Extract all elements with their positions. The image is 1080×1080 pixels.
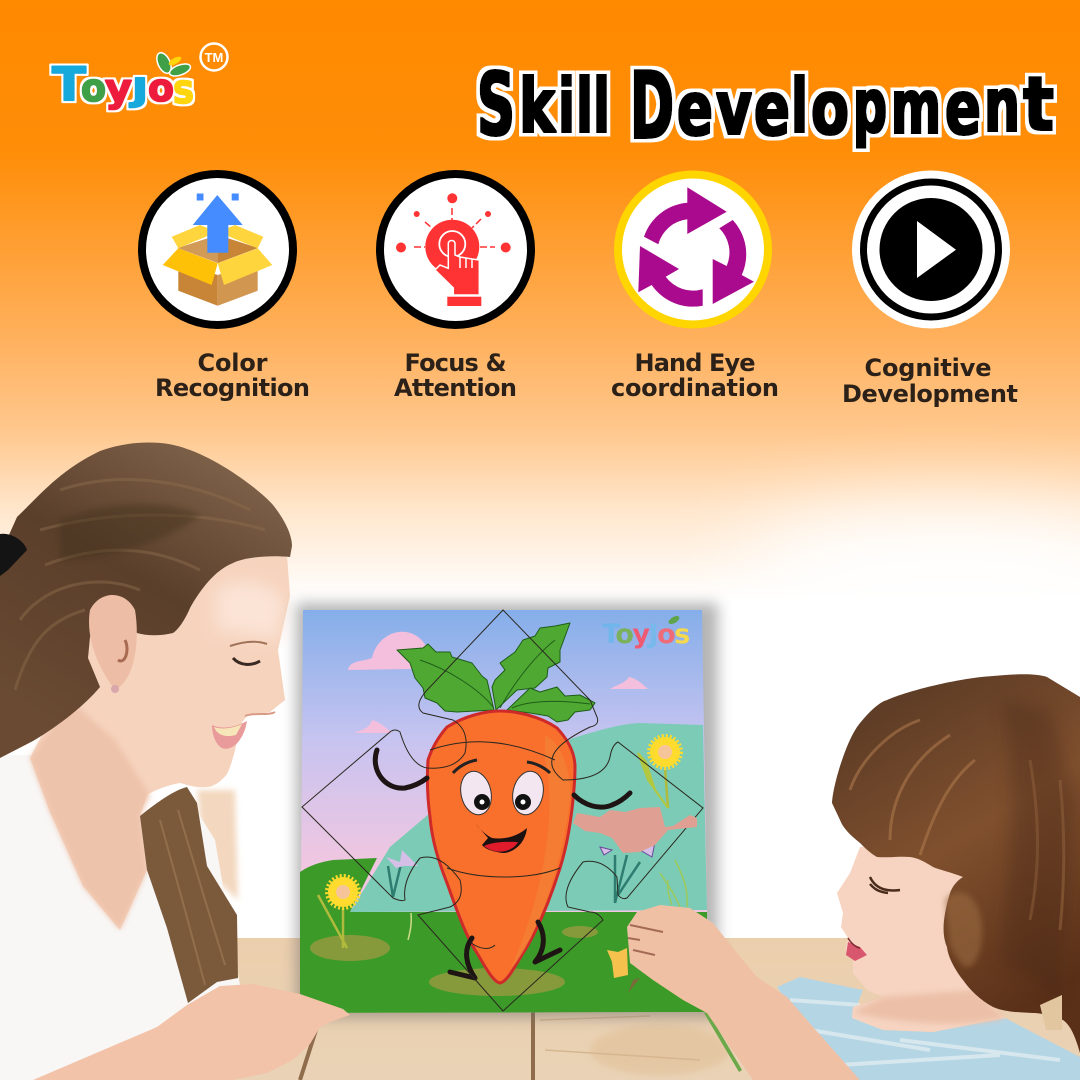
label: color recognition: Recognition <box>155 374 310 402</box>
white t-shirt <box>0 755 240 1080</box>
hair tie <box>0 534 27 576</box>
logo: o <box>81 66 106 110</box>
icon: cognitive development play <box>852 170 1010 328</box>
puzzle cut lines <box>302 610 703 1011</box>
dandelions <box>318 736 681 948</box>
logo: T <box>52 57 87 111</box>
photo: child <box>607 674 1080 1080</box>
small logo on board: oyJos <box>615 619 689 650</box>
green strip under arm <box>704 1012 742 1072</box>
photo: woman <box>0 442 292 1080</box>
carrot body <box>427 711 575 983</box>
adult hand on board <box>573 807 697 853</box>
label: focus and attention: Focus & <box>404 349 506 377</box>
label: cognitive development: Development <box>842 380 1018 408</box>
label: color recognition: Color <box>198 349 268 377</box>
neck and face <box>837 845 1005 1032</box>
title: o <box>811 64 849 152</box>
title: e <box>754 65 790 153</box>
carrot face <box>453 760 550 853</box>
label: hand eye coordination: coordination <box>611 374 779 402</box>
green ground <box>300 858 707 1013</box>
blurred background patch <box>197 790 238 900</box>
icon: focus and attention <box>380 174 531 325</box>
hair <box>0 442 292 758</box>
title: l <box>791 62 808 150</box>
title: n <box>984 61 1020 149</box>
neck and face <box>30 550 290 930</box>
label: cognitive development: Cognitive <box>864 354 992 382</box>
flower in hand <box>607 948 628 978</box>
title: S <box>477 54 515 156</box>
hair <box>832 674 1080 1053</box>
small logo on board: T <box>602 619 621 650</box>
logo: o <box>148 66 174 110</box>
label: focus and attention: Attention <box>394 374 517 402</box>
child face features <box>870 877 900 893</box>
small flowers and grass <box>386 842 687 940</box>
child arm and hand <box>627 905 860 1080</box>
label: hand eye coordination: Hand Eye <box>634 349 756 377</box>
long hair <box>140 787 238 1003</box>
hair highlight near neck <box>1040 995 1062 1030</box>
striped shirt <box>777 977 1080 1080</box>
title: e <box>677 65 713 153</box>
woman face features <box>233 658 260 664</box>
trademark mark: TM <box>205 50 223 65</box>
title: l <box>576 62 593 150</box>
carrot arms and legs <box>375 750 630 978</box>
teal hill <box>350 723 707 912</box>
trademark mark <box>200 44 228 70</box>
logo <box>52 44 228 113</box>
title: m <box>891 63 941 151</box>
ear <box>89 595 137 690</box>
title: p <box>853 62 887 150</box>
photo: woman hand <box>33 984 350 1080</box>
logo: J <box>129 71 148 109</box>
title: t <box>1023 60 1054 148</box>
logo: y <box>105 66 132 110</box>
puzzle board shadow <box>296 603 718 1018</box>
wooden table <box>230 938 1080 1080</box>
title: l <box>593 62 610 150</box>
title: v <box>716 64 752 152</box>
logo: s <box>173 67 194 113</box>
carrot leaves <box>397 623 595 722</box>
icon: colour recognition box <box>142 174 293 325</box>
clouds <box>348 632 470 670</box>
icon: hand eye coordination <box>618 174 768 324</box>
puzzle board <box>300 610 707 1013</box>
title: D <box>630 52 674 160</box>
title: k <box>519 62 557 150</box>
title: e <box>945 64 981 152</box>
title: i <box>558 62 575 150</box>
